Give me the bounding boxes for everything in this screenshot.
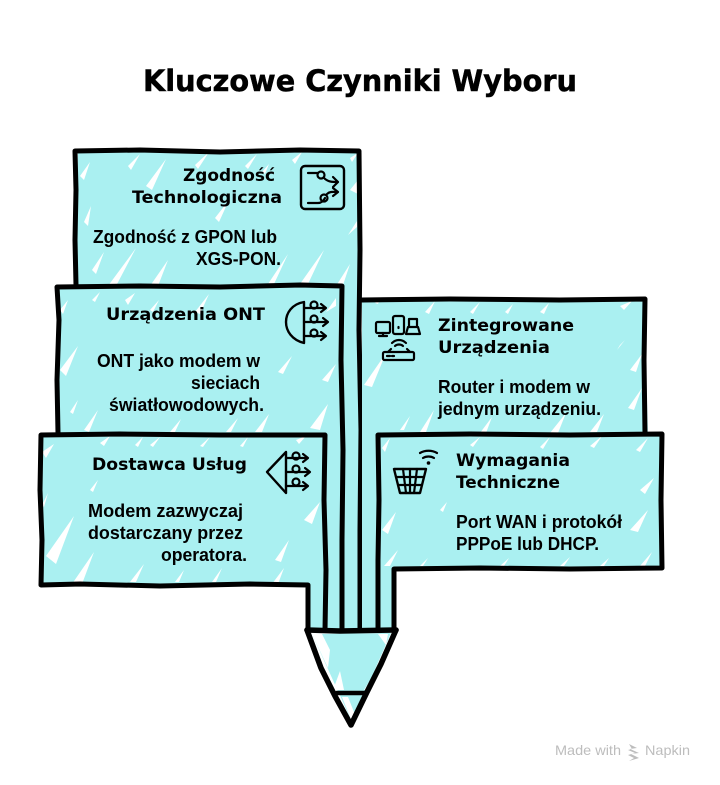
- heading: Zgodność: [183, 166, 275, 186]
- panel: Urządzenia ONT: [57, 285, 343, 630]
- heading: [132, 166, 282, 208]
- icon: Napkin logo: [628, 744, 639, 761]
- icon: basket with wifi: [394, 451, 437, 493]
- heading: Technologiczna: [132, 188, 282, 208]
- heading: [438, 316, 574, 358]
- description: Zgodność z GPON lub: [93, 227, 277, 247]
- description: Router i modem w: [438, 377, 591, 397]
- description: [93, 227, 281, 269]
- watermark: Made with Napkin: Made with: [555, 742, 621, 758]
- heading: [456, 451, 570, 493]
- description: sieciach: [191, 373, 260, 393]
- heading: Dostawca Usług: [92, 455, 247, 475]
- description: operatora.: [161, 545, 247, 565]
- panel: Zintegrowane Urządzenia: [362, 299, 648, 630]
- icon: switching paths: [301, 166, 344, 209]
- pencil tip: [307, 630, 396, 725]
- heading: Zintegrowane: [438, 316, 574, 336]
- description: Port WAN i protokół: [456, 512, 622, 532]
- panel: Zgodność Technologiczna: [75, 150, 361, 630]
- description: [88, 501, 247, 565]
- heading: Techniczne: [456, 473, 560, 493]
- icon: diamond splitting paths: [267, 452, 310, 493]
- panel: Wymagania Techniczne: [378, 434, 664, 630]
- watermark: Made with Napkin: Napkin: [645, 742, 690, 758]
- title: Kluczowe Czynniki Wyboru: [143, 64, 577, 98]
- description: [456, 512, 622, 554]
- description: jednym urządzeniu.: [437, 399, 601, 419]
- description: PPPoE lub DHCP.: [456, 534, 599, 554]
- icon: devices and router: [376, 316, 420, 360]
- description: [437, 377, 601, 419]
- heading: Urządzenia: [438, 338, 550, 358]
- description: [97, 351, 264, 415]
- heading: Wymagania: [456, 451, 570, 471]
- panel: Dostawca Usług: [40, 434, 326, 630]
- icon: half circle splitting paths: [286, 302, 328, 343]
- description: światłowodowych.: [109, 395, 264, 415]
- description: XGS-PON.: [196, 249, 281, 269]
- watermark: Made with Napkin: [555, 742, 690, 761]
- description: dostarczany przez: [88, 523, 243, 543]
- description: ONT jako modem w: [97, 351, 261, 371]
- heading: Urządzenia ONT: [106, 305, 265, 325]
- description: Modem zazwyczaj: [88, 501, 243, 521]
